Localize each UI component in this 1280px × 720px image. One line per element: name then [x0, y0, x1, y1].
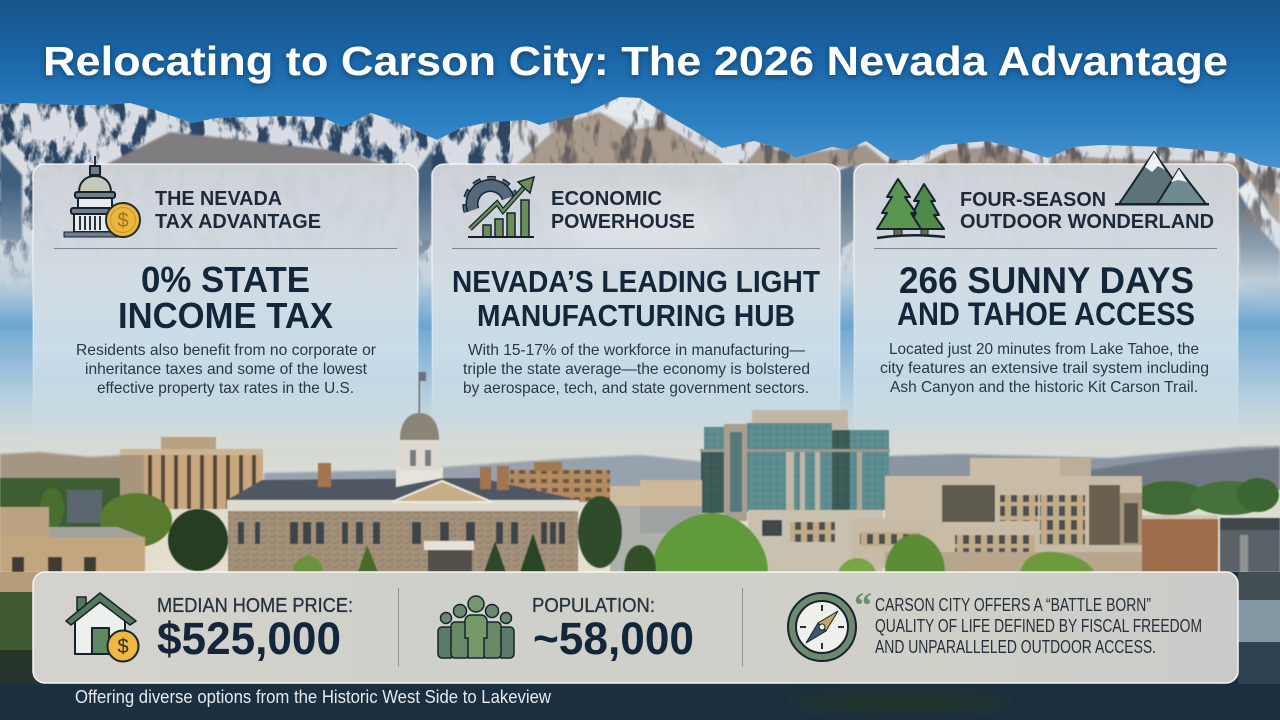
stat: 266 sunny days and Tahoe access: AND TAHOE ACCESS [897, 296, 1195, 332]
text block: economy details: triple the state average—the economy is bolstered [463, 361, 810, 378]
heading: four-season outdoor wonderland: FOUR-SEASON [960, 189, 1106, 211]
icon: quotation mark: “ [854, 585, 872, 625]
stat: 0% state income tax: INCOME TAX [118, 295, 333, 336]
background: lower foreground below bar [0, 572, 1280, 720]
right civic building [852, 458, 1142, 572]
icon: gear with rising chart [466, 177, 534, 238]
text block: economy details: With 15-17% of the workforce in manufacturing— [468, 342, 805, 359]
panel: four-season outdoor wonderland [854, 152, 1238, 450]
text block: Battle Born quote: AND UNPARALLELED OUTDOOR ACCESS. [875, 637, 1156, 657]
brick building behind courthouse [510, 470, 610, 502]
icon: house with coin [66, 593, 138, 662]
text block: Battle Born quote [875, 595, 1202, 657]
icon: house with coin: $ [117, 636, 129, 658]
trees left [67, 490, 102, 523]
icon: pine trees [877, 179, 945, 238]
courthouse [227, 372, 580, 572]
text block: economy details [463, 342, 810, 397]
tree belts [0, 478, 125, 538]
heading: Nevada tax advantage [155, 188, 321, 233]
stat: leading light manufacturing hub: MANUFACTURING HUB [477, 298, 795, 333]
left low building [0, 507, 49, 537]
stat: population: ~58,000 [533, 613, 694, 664]
text block: Battle Born quote: CARSON CITY OFFERS A “BATTLE BORN” [875, 595, 1151, 615]
panel: the Nevada tax advantage [33, 156, 418, 450]
foreground trees [652, 513, 768, 572]
left small buildings beside tower [640, 480, 702, 533]
icon: capitol dome with coin [64, 156, 140, 237]
text block: outdoor details [880, 341, 1209, 396]
text block: tax details: inheritance taxes and some of the lowest [85, 361, 368, 378]
background: distant hills [0, 446, 1280, 490]
stat: median home price: $525,000 [157, 613, 341, 664]
icon: mountain peaks [1115, 152, 1209, 206]
text block: outdoor details: Located just 20 minutes from Lake Tahoe, the [889, 341, 1199, 358]
text block: economy details: by aerospace, tech, and state government sectors. [463, 380, 809, 397]
icon: compass [788, 593, 856, 661]
text block: outdoor details: city features an extensive trail system including [880, 360, 1209, 377]
heading: Nevada tax advantage: TAX ADVANTAGE [155, 211, 321, 233]
stat: population: POPULATION: [532, 595, 655, 617]
right low buildings [1142, 517, 1218, 572]
stat: 0% state income tax: 0% STATE [141, 259, 310, 300]
panel: economic powerhouse [432, 164, 840, 450]
text block: outdoor details: Ash Canyon and the historic Kit Carson Trail. [890, 379, 1198, 396]
footnote: housing options: Offering diverse options from the Historic West Side to Lakeview [75, 687, 552, 707]
panel: bottom statistics bar [33, 572, 1238, 683]
heading: four-season outdoor wonderland: OUTDOOR WONDERLAND [960, 211, 1214, 233]
stat: median home price: MEDIAN HOME PRICE: [157, 595, 353, 617]
title: Relocating to Carson City: The 2026 Nevada Advantage [43, 38, 1228, 84]
stat: 266 sunny days and Tahoe access [897, 260, 1195, 332]
heading: four-season outdoor wonderland [960, 189, 1214, 233]
text block: tax details: effective property tax rates in the U.S. [97, 380, 354, 397]
background: city skyline [0, 372, 1280, 572]
glass tower [700, 410, 890, 572]
stat: 0% state income tax [118, 259, 333, 336]
text block: tax details: Residents also benefit from no corporate or [76, 342, 377, 359]
heading: economic powerhouse: ECONOMIC [551, 188, 662, 210]
stat: leading light manufacturing hub [452, 264, 820, 333]
heading: economic powerhouse: POWERHOUSE [551, 211, 695, 233]
icon: capitol dome with coin: $ [117, 210, 129, 232]
heading: Nevada tax advantage: THE NEVADA [155, 188, 282, 210]
text block: tax details [76, 342, 377, 397]
background: snow-capped mountains [0, 90, 1280, 330]
background: sky [0, 0, 1280, 572]
stat: 266 sunny days and Tahoe access: 266 SUNNY DAYS [899, 260, 1194, 301]
stat: leading light manufacturing hub: NEVADA’S LEADING LIGHT [452, 264, 820, 299]
heading: economic powerhouse [551, 188, 695, 233]
left tall office building [161, 437, 216, 450]
icon: group of people [438, 596, 514, 658]
cupola [396, 467, 443, 487]
